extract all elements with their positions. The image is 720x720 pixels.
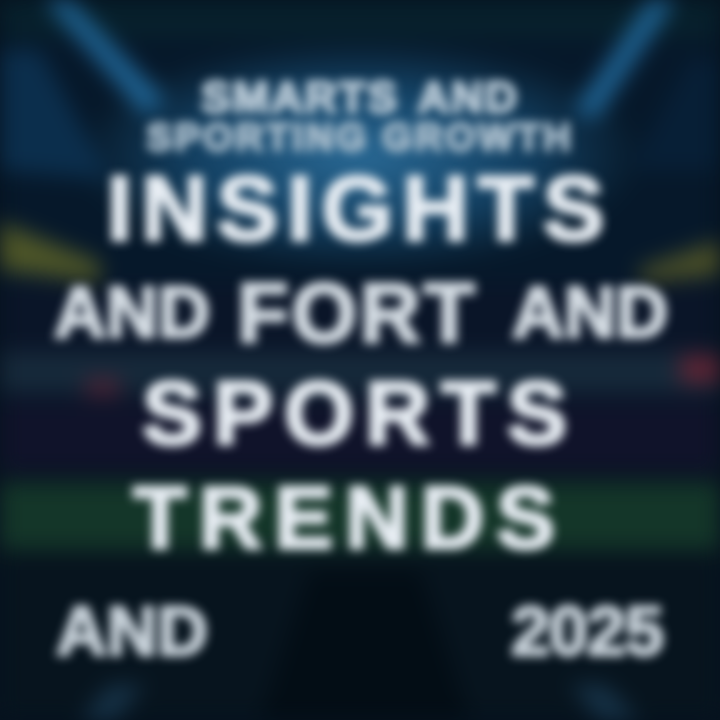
heading: and fort and: AND [512,273,668,353]
heading: and fort and: FORT [237,266,478,360]
heading: insights: INSIGHTS [107,158,613,260]
heading: sports: SPORTS [142,364,578,464]
bottom right label: 2025 [511,592,663,670]
bottom left label: AND [56,592,208,670]
title line one: SMARTS AND [201,73,519,122]
title line two: SPORTING GROWTH [146,117,574,159]
heading: trends: TRENDS [133,468,567,567]
heading: and fort and: AND [54,273,210,353]
heading: and fort and [48,266,674,360]
